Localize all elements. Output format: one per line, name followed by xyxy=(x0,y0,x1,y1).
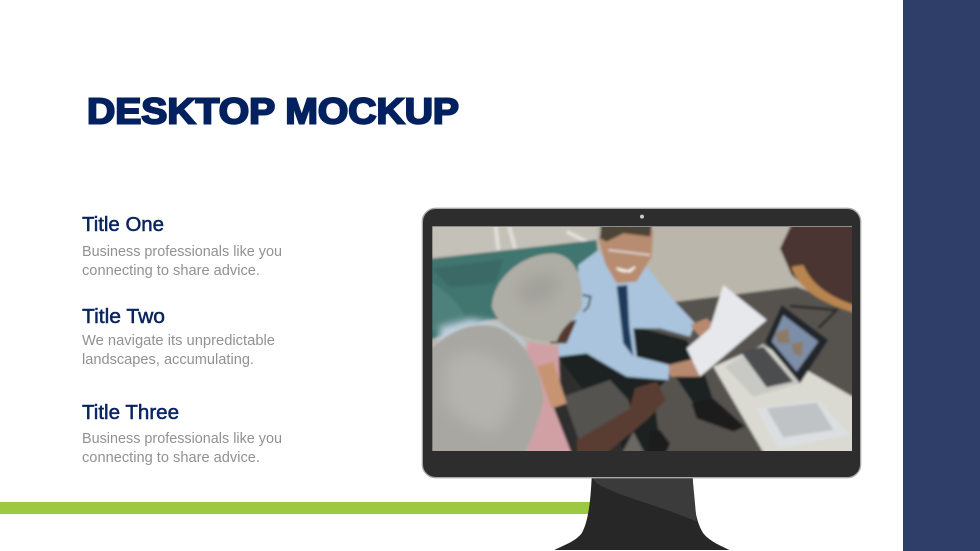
table xyxy=(712,345,852,451)
monitor stand xyxy=(554,477,729,550)
man trousers xyxy=(561,327,714,451)
right side panel xyxy=(903,0,980,551)
text block: title two: We navigate its unpredictable xyxy=(82,332,275,349)
armchair xyxy=(779,227,852,306)
woman hand xyxy=(537,362,567,408)
text block: title one: Title One xyxy=(82,214,164,236)
green accent bar xyxy=(0,502,592,514)
text block: title one: Business professionals like you xyxy=(82,243,282,260)
older man neck xyxy=(550,320,577,343)
desktop monitor xyxy=(420,208,867,550)
screen photo xyxy=(432,226,852,451)
woman hair xyxy=(432,324,544,451)
text block: title one xyxy=(82,214,282,279)
sofa xyxy=(420,240,598,343)
man tie xyxy=(617,285,633,357)
carpet xyxy=(643,286,852,451)
dark backing behind figures xyxy=(552,354,626,451)
text block: title three: Title Three xyxy=(82,402,179,424)
held paper xyxy=(687,285,767,377)
text block: title three: Business professionals like you xyxy=(82,430,282,447)
man face xyxy=(598,230,653,283)
text block: title three xyxy=(82,402,282,466)
man hands xyxy=(668,318,718,377)
pink shirt xyxy=(526,342,573,451)
older man hair xyxy=(492,253,582,342)
text block: title two: Title Two xyxy=(82,306,165,328)
laptop xyxy=(725,344,800,397)
older man trousers xyxy=(563,380,633,443)
man shirt xyxy=(558,250,695,380)
screen top line xyxy=(432,225,852,228)
monitor body xyxy=(422,208,861,478)
table document xyxy=(757,400,850,448)
older man arm xyxy=(576,381,666,451)
camera dot xyxy=(640,215,644,219)
text block: title two xyxy=(82,306,275,368)
glasses arm xyxy=(583,295,591,312)
text block: title two: landscapes, accumulating. xyxy=(82,351,254,368)
man shoe xyxy=(692,398,745,432)
text block: title one: connecting to share advice. xyxy=(82,262,260,279)
title: DESKTOP MOCKUP xyxy=(87,90,459,132)
text block: title three: connecting to share advice. xyxy=(82,449,260,466)
